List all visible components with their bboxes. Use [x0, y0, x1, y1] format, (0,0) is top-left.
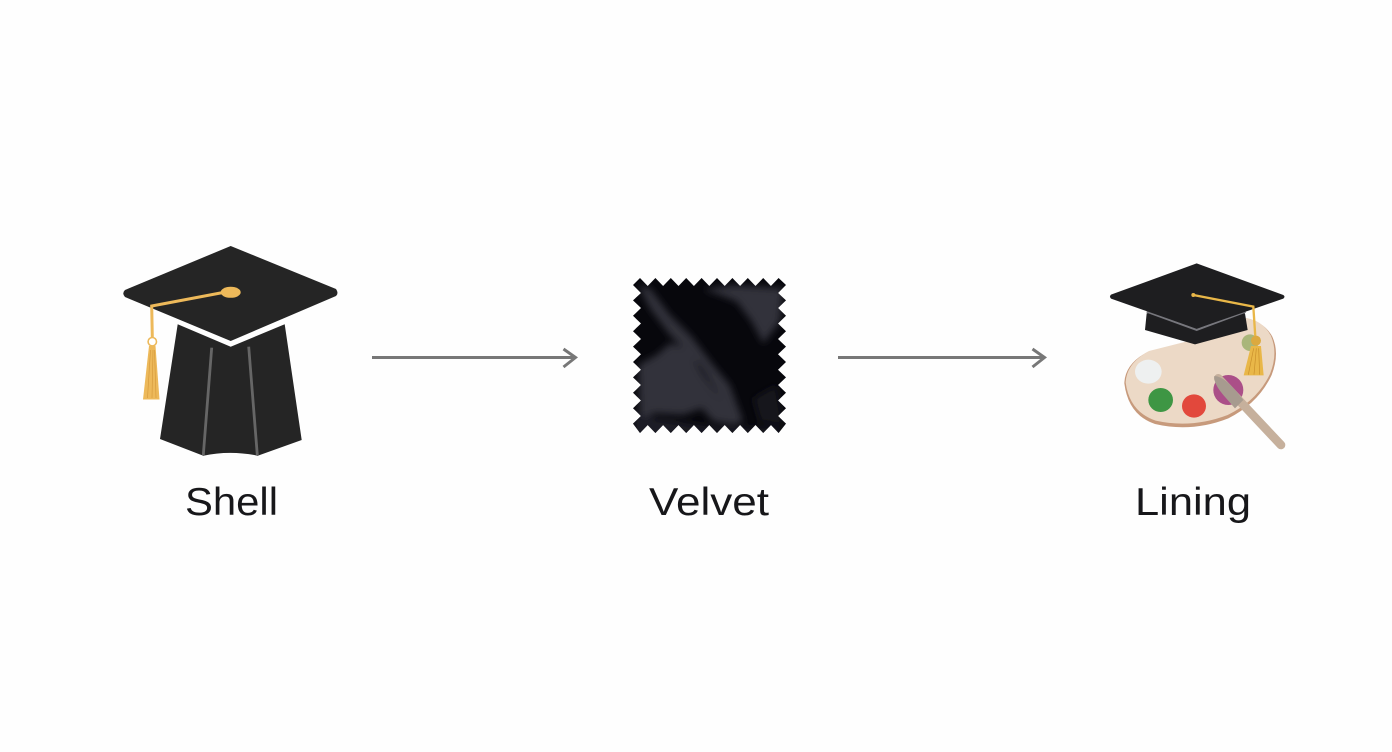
icon: velvet swatch with pinked edges [630, 275, 790, 437]
arrow: shell to velvet [372, 349, 576, 367]
step 2: velvet [630, 275, 790, 524]
label: Lining: Lining [1135, 481, 1251, 524]
label: Shell: Shell [185, 481, 278, 524]
icon: paintbrush [1214, 376, 1281, 445]
infographic canvas [123, 246, 1286, 523]
step 3: lining [1110, 263, 1284, 524]
step 1: shell [123, 246, 338, 524]
icon: mortarboard cap [123, 246, 338, 400]
icon: artist palette [1124, 317, 1281, 445]
arrow: velvet to lining [838, 349, 1044, 367]
icon: mortarboard cap on palette [1110, 263, 1284, 375]
label: Velvet: Velvet [649, 481, 769, 524]
icon: graduation gown [160, 324, 302, 456]
